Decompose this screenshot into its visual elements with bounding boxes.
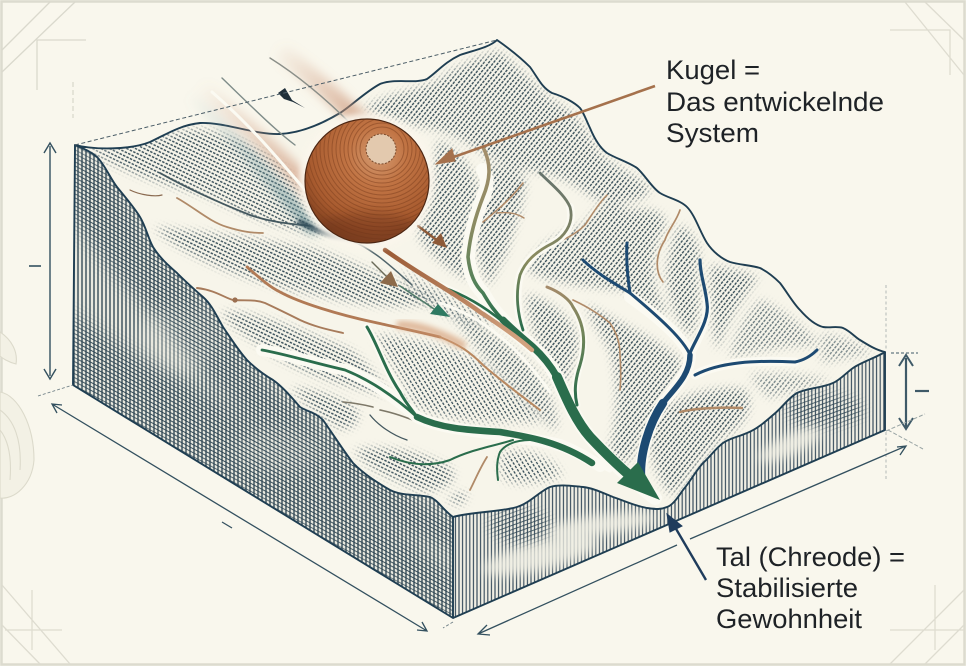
ball contour lines	[306, 120, 428, 234]
faint shell sketch at left edge	[0, 332, 34, 498]
green side valley	[262, 327, 592, 480]
dimension: front left length	[38, 385, 453, 631]
corner ornament: top left	[2, 2, 86, 118]
brown ridge lines	[177, 183, 742, 490]
dimension: right height	[886, 285, 929, 480]
corner ornament: top right	[890, 2, 964, 75]
callout arrow: ball	[436, 86, 655, 164]
block outlines	[73, 40, 885, 618]
ball body	[305, 119, 429, 243]
blue valley	[583, 243, 817, 476]
river halo	[262, 170, 795, 498]
label: valley: Gewohnheit	[716, 604, 862, 634]
ball highlight	[366, 134, 396, 164]
label: ball	[666, 55, 884, 148]
dark fleck in the trail	[278, 88, 305, 108]
ball: das entwickelnde System	[296, 110, 440, 253]
green arrowhead at valley floor	[617, 462, 660, 500]
block: left face	[74, 146, 452, 616]
dimension: front right length	[478, 446, 906, 635]
corner ornament: bottom right	[890, 585, 964, 664]
corner ornament: bottom left	[2, 585, 70, 664]
dimension: left height	[29, 143, 56, 379]
block: right face	[450, 340, 890, 625]
label: valley	[716, 542, 905, 634]
dark crease streaks	[130, 173, 420, 440]
terrain surface	[88, 45, 875, 511]
motion trails behind ball	[195, 55, 378, 240]
green main valley	[442, 147, 640, 484]
river valleys	[262, 147, 817, 498]
ball trail and small arrows	[350, 226, 532, 350]
label: ball: Das entwickelnde	[666, 87, 884, 117]
callout arrow: valley	[667, 514, 706, 580]
ball halo	[299, 113, 435, 249]
label: valley: Stabilisierte	[716, 573, 858, 603]
label: ball: System	[666, 118, 759, 148]
label: valley: Tal (Chreode) =	[716, 542, 905, 572]
label: ball: Kugel =	[666, 55, 760, 85]
dashed dimension line: back edge	[75, 40, 497, 145]
